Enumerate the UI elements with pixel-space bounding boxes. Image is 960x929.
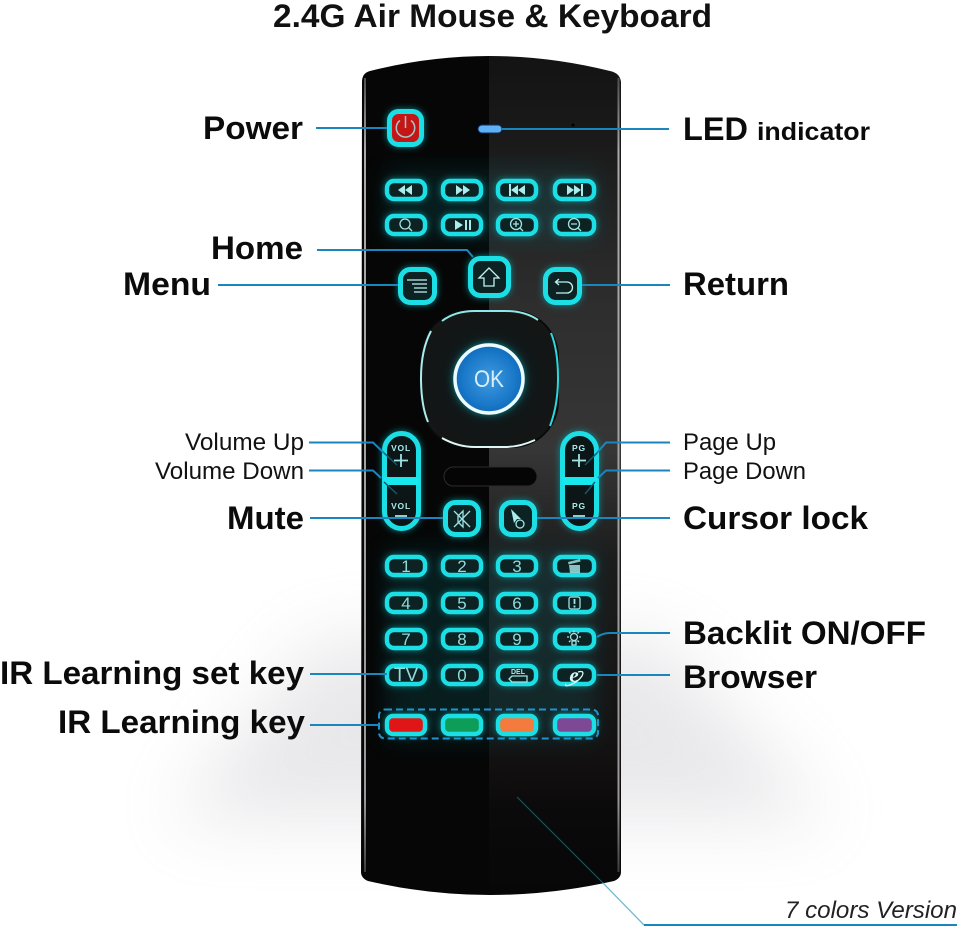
return key	[546, 270, 580, 302]
number keys row 1	[387, 557, 594, 576]
label: Backlit ON/OFF: Backlit ON/OFF	[683, 615, 926, 651]
OK button: OK	[474, 366, 504, 393]
label: Return: Return	[683, 266, 789, 302]
media keys row 1	[387, 181, 594, 199]
label: LED indicator: indicator	[757, 118, 870, 146]
number keys row 4: DEL	[511, 669, 526, 676]
number keys row 3: 7	[401, 630, 411, 649]
number keys row 2: 5	[457, 594, 467, 613]
label: IR Learning set key: IR Learning set key	[0, 655, 304, 691]
background shadow	[170, 640, 830, 820]
number keys row 1: 3	[512, 557, 522, 576]
volume rocker: VOL	[391, 443, 411, 453]
number keys row 1: 2	[457, 557, 467, 576]
label: IR Learning key: IR Learning key	[58, 704, 305, 740]
label: Page Up: Page Up	[683, 429, 776, 456]
page rocker: PG	[572, 443, 586, 453]
page rocker: PG	[572, 501, 586, 511]
label: Browser: Browser	[683, 659, 817, 695]
number keys row 2	[387, 594, 594, 613]
voice slot	[444, 467, 537, 486]
icon: browser e	[566, 663, 583, 687]
label: Volume Down: Volume Down	[155, 458, 304, 485]
label: 7 colors Version	[517, 797, 957, 925]
number keys row 1: 1	[401, 557, 411, 576]
menu key	[400, 270, 434, 302]
mute key	[446, 502, 478, 534]
number keys row 2: 4	[401, 594, 411, 613]
label: Mute: Mute	[227, 500, 304, 536]
number keys row 3	[387, 630, 594, 649]
label: Cursor lock: Cursor lock	[683, 500, 868, 536]
number keys row 3: 8	[457, 630, 467, 649]
icon: browser e: e	[569, 663, 579, 687]
power button	[390, 112, 422, 144]
number keys row 4: 0	[457, 666, 467, 685]
label: Page Down: Page Down	[683, 458, 806, 485]
label: Volume Down	[155, 458, 397, 494]
label: Menu: Menu	[123, 266, 211, 302]
remote control	[360, 50, 623, 900]
remote body	[360, 50, 623, 900]
number keys row 3: 9	[512, 630, 522, 649]
number keys row 4	[387, 663, 594, 687]
number keys row 2: 6	[512, 594, 522, 613]
label: Volume Up: Volume Up	[185, 429, 304, 456]
label: Volume Up	[185, 429, 397, 465]
LED and pinhole	[478, 124, 574, 133]
media keys row 2	[387, 216, 594, 234]
volume rocker	[384, 434, 419, 528]
label: Home: Home	[211, 230, 303, 266]
label: Page Down	[585, 458, 806, 494]
label: Power: Power	[203, 110, 303, 146]
cursor lock key	[502, 502, 534, 534]
IR learning colour keys	[379, 710, 598, 738]
label: Home	[211, 230, 473, 266]
label: Page Up	[585, 429, 776, 465]
OK directional pad	[421, 311, 558, 447]
label: 7 colors Version: 7 colors Version	[785, 897, 957, 924]
home key	[470, 258, 508, 296]
label: LED indicator	[502, 111, 870, 147]
page rocker	[562, 434, 597, 528]
number keys row 4: TV	[394, 665, 418, 686]
label: LED indicator: LED	[683, 111, 748, 147]
volume rocker: VOL	[391, 501, 411, 511]
